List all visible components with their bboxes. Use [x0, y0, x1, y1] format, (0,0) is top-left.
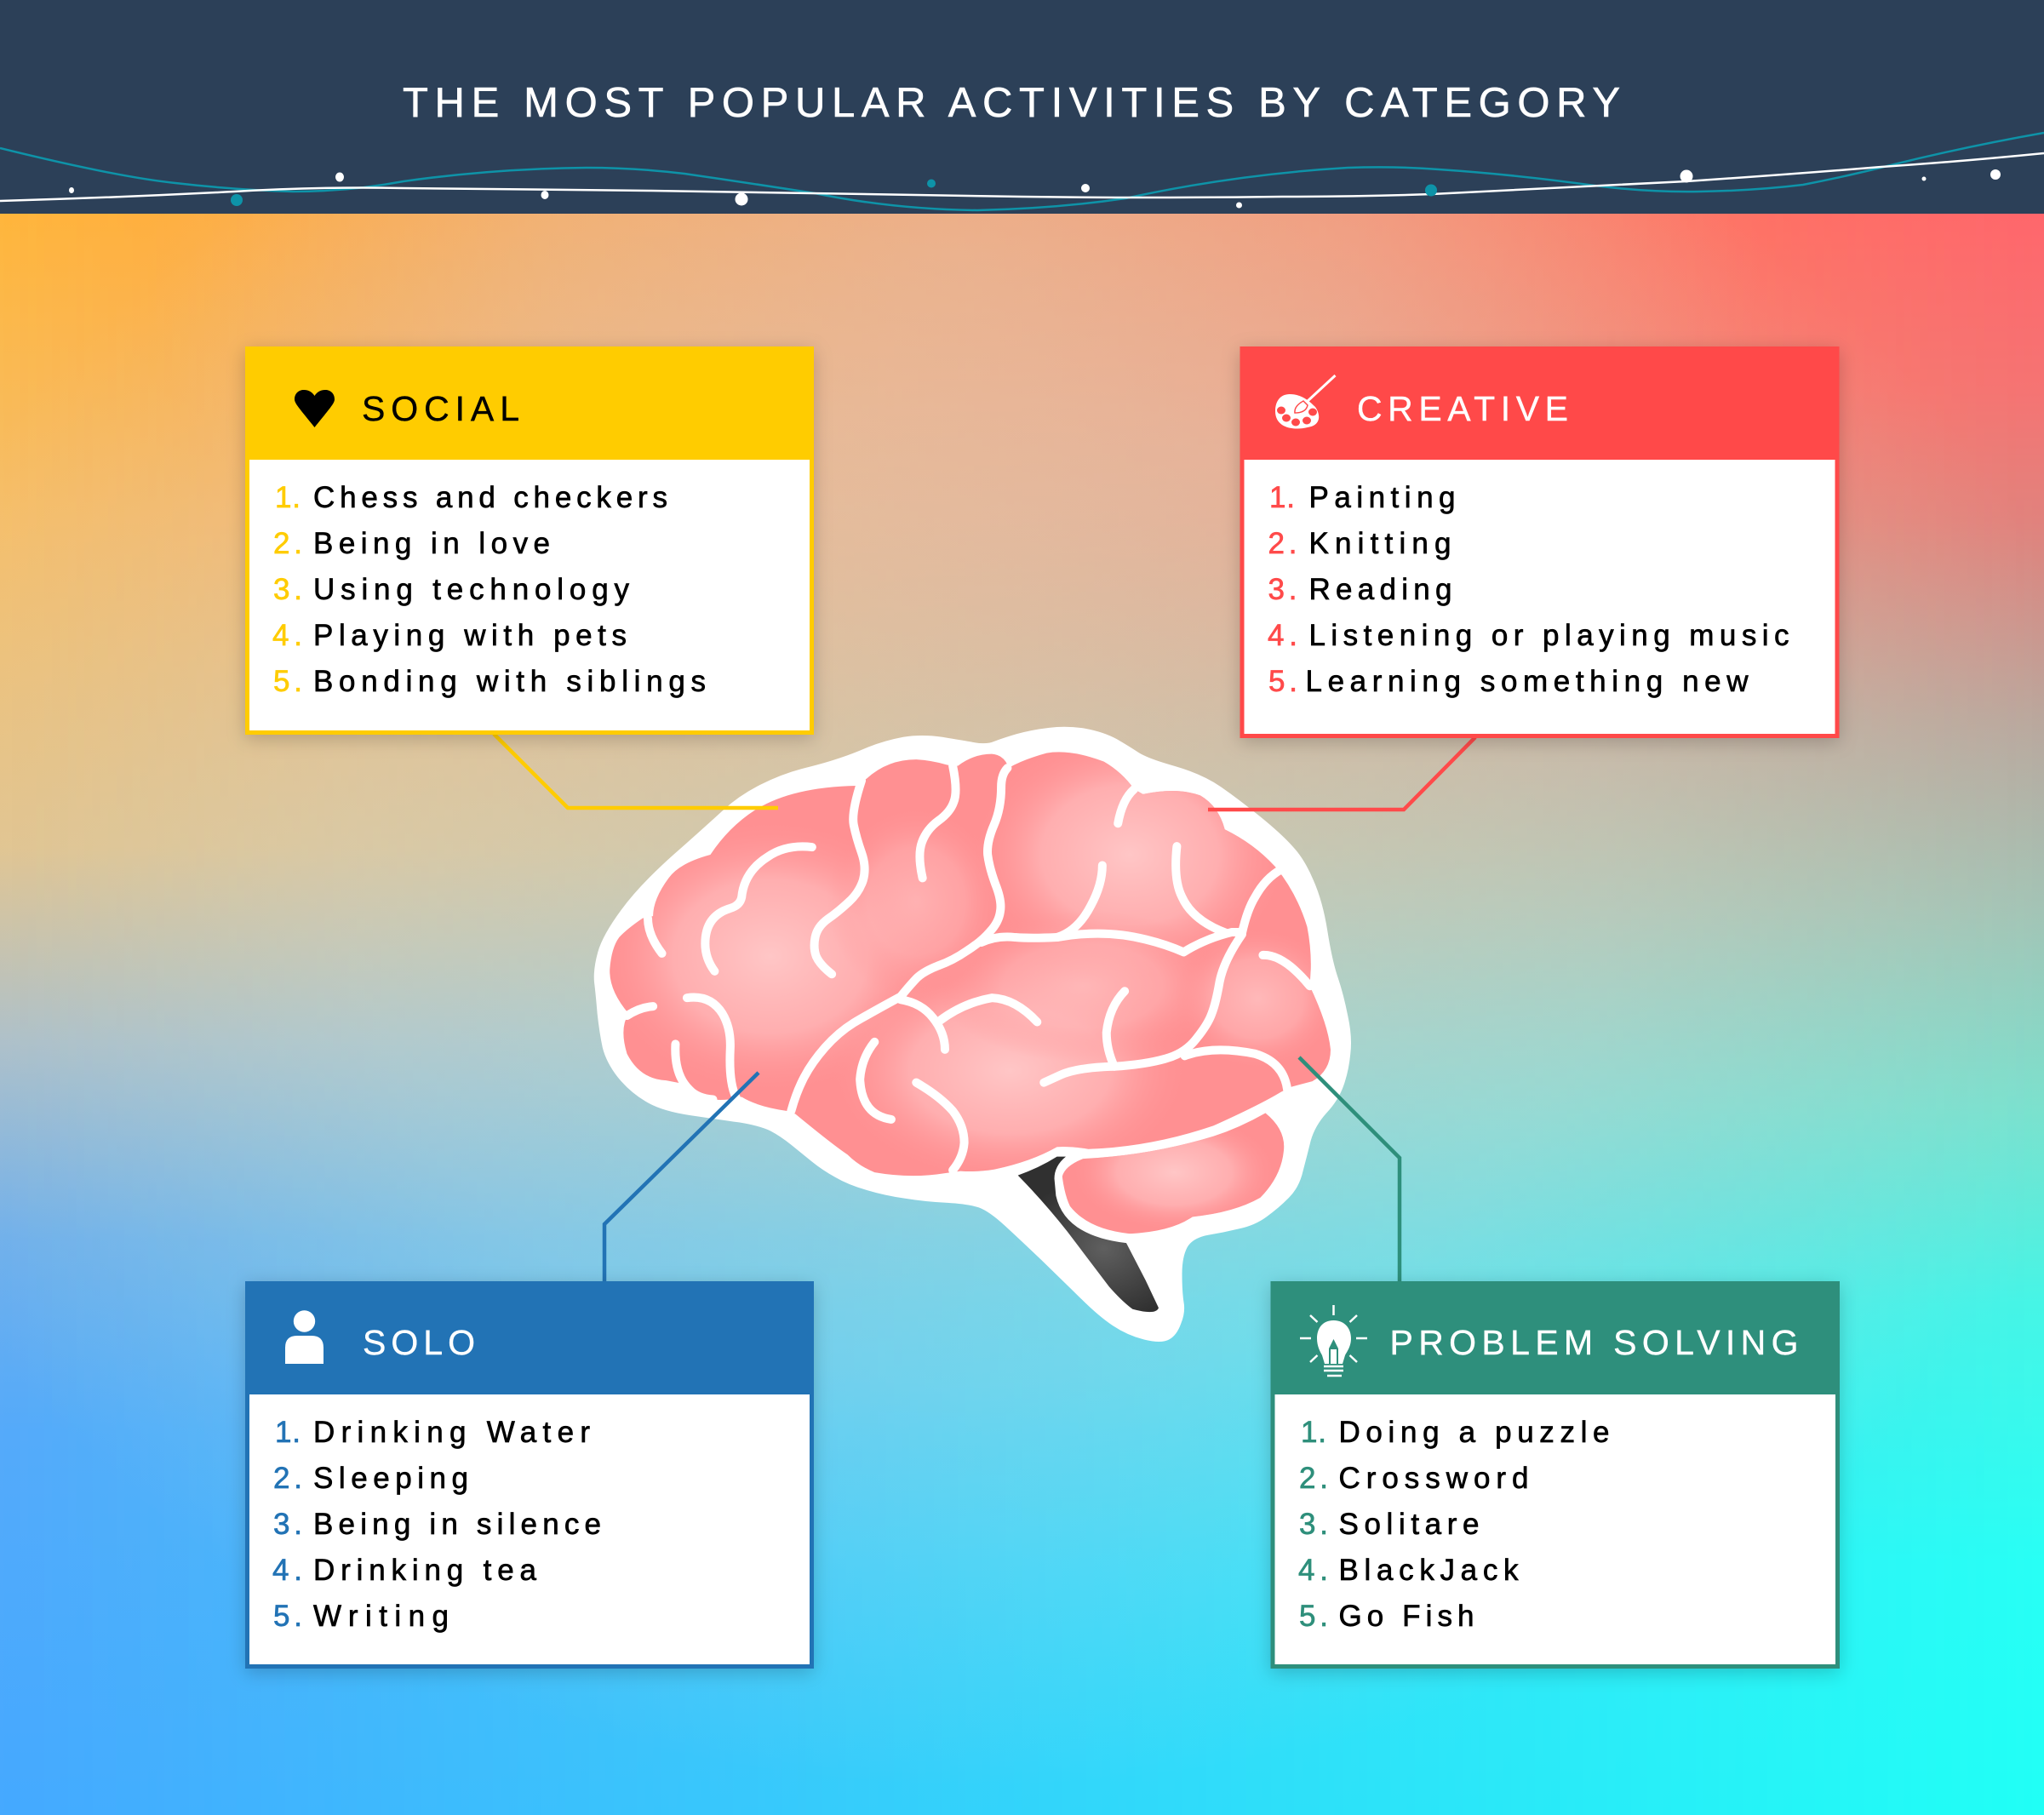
- brain stem: [1018, 1157, 1159, 1312]
- list: solo: 2.: [273, 1462, 302, 1495]
- list: problem solving: Go Fish: [1338, 1600, 1474, 1633]
- list: problem solving: BlackJack: [1338, 1554, 1519, 1587]
- list: creative: [1268, 481, 1789, 698]
- list: creative: 5.: [1268, 665, 1297, 698]
- list: social: Chess and checkers: [313, 481, 667, 514]
- panel: creative: [1240, 346, 1839, 738]
- header band: [0, 0, 2044, 214]
- heading: problem solving: PROBLEM SOLVING: [1389, 1323, 1798, 1362]
- connector: social: [494, 734, 778, 808]
- panel: social: [245, 346, 814, 735]
- icon: light bulb with pencil: [1300, 1305, 1367, 1376]
- icon: heart: [295, 390, 335, 427]
- list: creative: Listening or playing music: [1309, 619, 1789, 652]
- panel: problem solving: [1270, 1281, 1840, 1669]
- cerebellum: [1062, 1114, 1284, 1234]
- list: problem solving: [1298, 1416, 1609, 1633]
- list: solo: Being in silence: [313, 1508, 601, 1541]
- star dots: [69, 169, 2001, 208]
- brain folds: [627, 766, 1310, 1171]
- list: creative: Learning something new: [1306, 665, 1749, 698]
- list: social: Using technology: [313, 573, 630, 606]
- list: problem solving: 1.: [1301, 1416, 1326, 1449]
- teal wave line: [0, 133, 2044, 210]
- panel: solo: [245, 1281, 814, 1669]
- list: solo: 3.: [273, 1508, 302, 1541]
- brain illustration: [593, 727, 1351, 1342]
- list: social: Bonding with siblings: [313, 665, 706, 698]
- heading: solo: SOLO: [363, 1323, 475, 1362]
- list: solo: 5.: [273, 1600, 302, 1633]
- list: solo: 4.: [272, 1554, 302, 1587]
- list: solo: 1.: [275, 1416, 301, 1449]
- connector: solo: [604, 1073, 759, 1281]
- list: problem solving: Crossword: [1338, 1462, 1529, 1495]
- list: social: 3.: [273, 573, 302, 606]
- heading: creative: CREATIVE: [1357, 389, 1568, 428]
- list: creative: Reading: [1309, 573, 1452, 606]
- icon: person: [285, 1310, 323, 1364]
- list: creative: 3.: [1268, 573, 1297, 606]
- list: creative: 2.: [1268, 527, 1297, 560]
- connector: problem solving: [1299, 1057, 1400, 1281]
- title: THE MOST POPULAR ACTIVITIES BY CATEGORY: [403, 80, 1620, 126]
- cerebrum lobes: [610, 752, 1331, 1177]
- list: social: Playing with pets: [313, 619, 627, 652]
- list: social: [272, 481, 706, 698]
- list: problem solving: 5.: [1299, 1600, 1328, 1633]
- list: social: 1.: [275, 481, 301, 514]
- list: problem solving: 3.: [1299, 1508, 1328, 1541]
- list: problem solving: Doing a puzzle: [1338, 1416, 1609, 1449]
- list: social: Being in love: [313, 527, 550, 560]
- list: problem solving: 2.: [1299, 1462, 1328, 1495]
- list: solo: Drinking tea: [313, 1554, 537, 1587]
- list: creative: 1.: [1269, 481, 1295, 514]
- list: problem solving: 4.: [1298, 1554, 1328, 1587]
- list: social: 4.: [272, 619, 302, 652]
- list: creative: 4.: [1268, 619, 1297, 652]
- list: social: 2.: [273, 527, 302, 560]
- brain white outline: [594, 727, 1351, 1342]
- list: problem solving: Solitare: [1338, 1508, 1480, 1541]
- connector: creative: [1208, 737, 1475, 810]
- heading: social: SOCIAL: [362, 389, 519, 428]
- icon: palette and brush: [1275, 375, 1335, 429]
- list: creative: Knitting: [1309, 527, 1451, 560]
- list: social: 5.: [273, 665, 302, 698]
- list: solo: [272, 1416, 601, 1633]
- list: solo: Sleeping: [313, 1462, 468, 1495]
- list: solo: Drinking Water: [313, 1416, 590, 1449]
- list: creative: Painting: [1309, 481, 1456, 514]
- list: solo: Writing: [313, 1600, 449, 1633]
- white wave line: [0, 153, 2044, 201]
